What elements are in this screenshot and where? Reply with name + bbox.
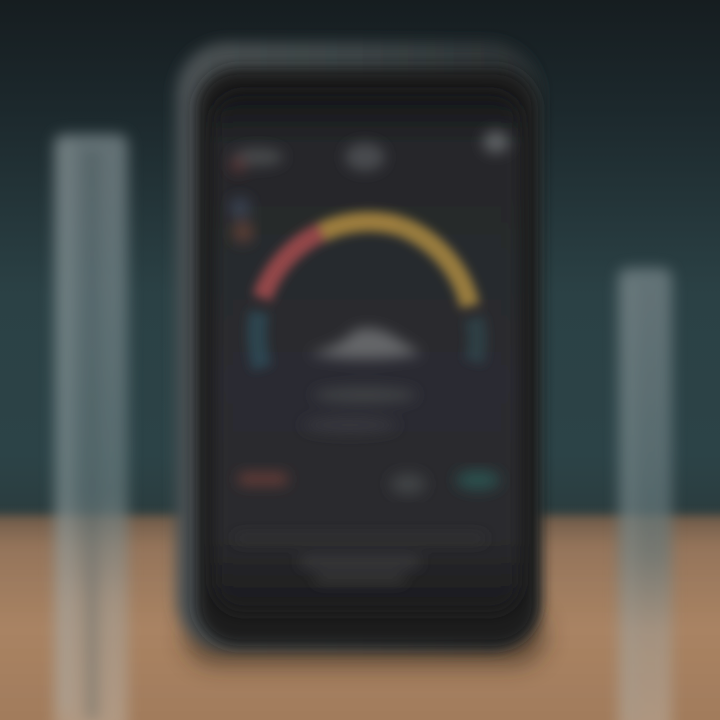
phone body [176,42,540,650]
wooden table [0,515,720,720]
left glass tube [54,134,128,720]
phone [176,42,545,665]
phone inner bezel [196,68,538,646]
side indicators [229,197,254,243]
gauge arc [257,222,477,368]
phone screen [214,92,520,612]
gauge readout [302,328,422,433]
bottom stats row [238,470,500,495]
bottom text lines [235,535,485,582]
right glass tube [618,268,672,720]
status icons row [230,131,509,173]
phone shadow [185,605,545,665]
background wall [0,0,720,535]
